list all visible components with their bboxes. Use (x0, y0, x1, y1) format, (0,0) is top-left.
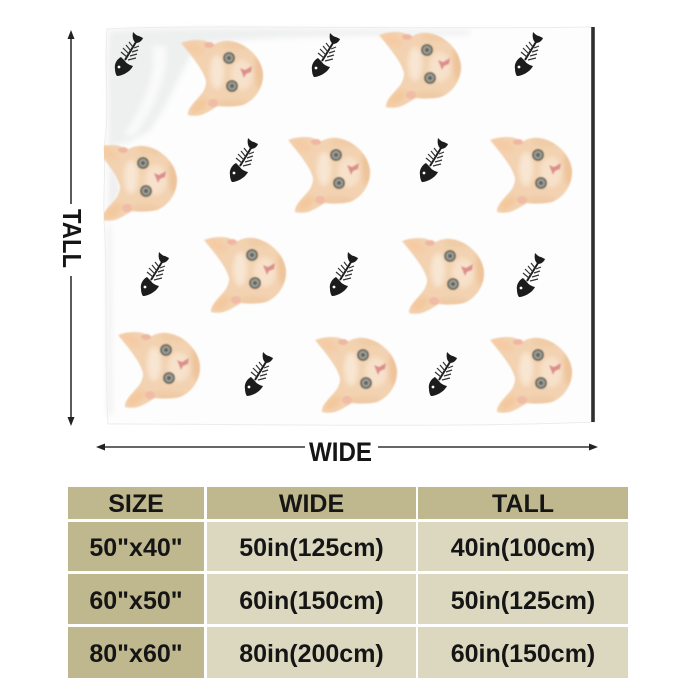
tall label: TALL (57, 209, 87, 268)
tall arrow (57, 30, 87, 426)
row 3 size: 80"x60" (89, 640, 183, 668)
row 1 wide: 50in(125cm) (239, 534, 384, 562)
illustration: blanket with dimension arrows (63, 26, 598, 461)
fish 8 (517, 253, 545, 297)
cat 8 (118, 330, 202, 408)
fish 4 (230, 138, 258, 182)
fish 1 (115, 32, 143, 76)
cat faces (95, 30, 574, 413)
header: tall (418, 487, 628, 519)
fish 6 (141, 252, 169, 296)
row 3 size (68, 627, 204, 678)
cat 6 (204, 235, 288, 313)
fish bones (115, 32, 545, 396)
row 1 tall (418, 522, 628, 571)
header: size: SIZE (108, 490, 164, 518)
header: wide: WIDE (279, 490, 344, 518)
row 1 tall: 40in(100cm) (451, 534, 595, 562)
cat 5 (490, 135, 574, 213)
blanket folds (107, 28, 470, 415)
header: tall: TALL (492, 490, 554, 518)
fish 5 (420, 138, 448, 182)
cat 9 (315, 335, 399, 413)
row 2 size: 60"x50" (89, 586, 183, 614)
cat 7 (402, 236, 486, 314)
row 3 tall (418, 627, 628, 678)
row 3 wide (207, 627, 416, 678)
header: size (68, 487, 204, 519)
row 2 wide (207, 574, 416, 624)
fish 2 (312, 33, 340, 77)
row 3 wide: 80in(200cm) (239, 640, 384, 668)
row 1 size: 50"x40" (89, 534, 183, 562)
fish 9 (245, 352, 273, 396)
cat 4 (288, 135, 372, 213)
blanket (104, 27, 594, 425)
header: wide (207, 487, 416, 519)
row 3 tall: 60in(150cm) (451, 640, 595, 668)
row 2 wide: 60in(150cm) (239, 586, 384, 614)
wide label: WIDE (309, 437, 372, 467)
row 2 tall: 50in(125cm) (451, 586, 595, 614)
cat 3 (104, 144, 178, 222)
cat 10 (490, 335, 574, 413)
fish 3 (515, 32, 543, 76)
row 1 size (68, 522, 204, 571)
wide arrow (96, 437, 598, 467)
blanket dark right edge (591, 27, 595, 422)
cat 2 (379, 30, 463, 108)
row 2 size (68, 574, 204, 624)
fish 10 (429, 352, 457, 396)
row 1 wide (207, 522, 416, 571)
cat 1 (181, 38, 265, 116)
fish 7 (330, 252, 358, 296)
row 2 tall (418, 574, 628, 624)
